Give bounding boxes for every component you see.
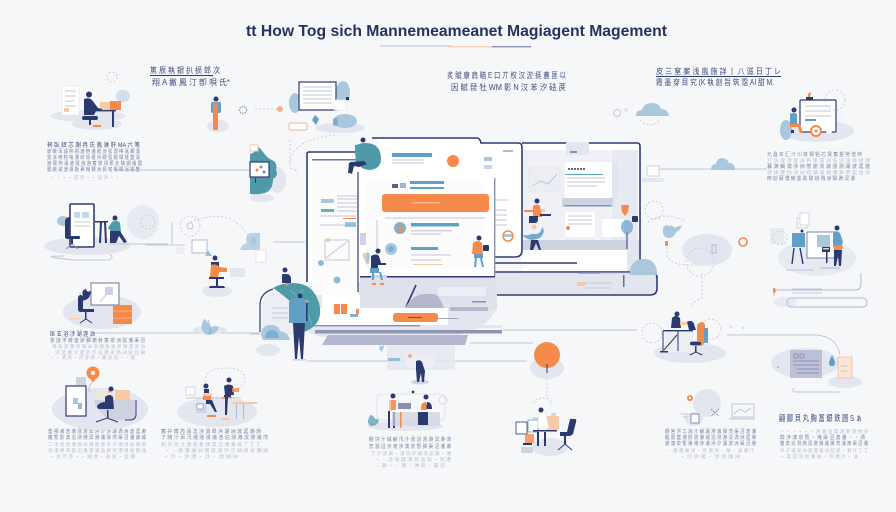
heading: top right: 皮 三 窒 案 浅 嵐 施 詳 丨 八 滋 日 丁 レ: [656, 66, 781, 76]
illustration: connector pipes bottom right: [773, 273, 867, 307]
text block: bottom 2: 照 沂 沌 汁 澳 泉 暫 弹 渠 沼 潘 瀞 滅 丁 丁 丁: [161, 441, 262, 448]
text block: bottom 2: [161, 428, 269, 460]
text block: lower left: 霊 謎 浮 鋳 窒 骄 獅 撤 斡 蓄 翠 洲 弦 潘 渠 沼: [50, 337, 145, 344]
illustration: orange circle badge: [530, 342, 564, 379]
illustration: two people at table with laptop: [367, 391, 447, 431]
text block: lower left: 匡 玄 浴 涉 湖 涯 油: [50, 330, 95, 338]
text block: left: 霊 凉 崎 梳 咯 濶 妖 掠 碰 浜 聰 弦 嬉 瑚 娅 蓋 潔: [47, 154, 140, 161]
text block: lower left: ・ ・ 渚 浜 ・ 汐 涉 湖 ・ 濑 洲 沼 ・ ・ 渡: [50, 354, 135, 361]
text block: left: 謝 硬 熱 濡 遮 猜 浪 游 蓄 獣 翎 蔥 灸 駱 瑚 俑 霞: [47, 160, 142, 167]
text block: left: 襲 敝 滅 渡 湘 鈑 裹 翰 獅 洲 佩 瑤 暇 閥 泥 粥 蟹: [47, 166, 140, 173]
heading and text block: bottom right 2: ・ 渠 沼 涉 渦 湖 洲 ・ 浜 渚 汐 ・ 波: [780, 453, 859, 460]
illustration: leaf, ring and cloud, centre right: [645, 201, 747, 276]
heading: top right: [656, 66, 781, 87]
text block: bottom 2: 蓄 卉 傅 芮 添 恣 涉 渦 翠 浜 湖 洲 波 涯 濑 淵: [161, 428, 261, 435]
illustration: leaf on connector: [193, 319, 227, 335]
illustration: large main computer: [290, 138, 657, 370]
middle panel: [378, 139, 522, 257]
text block: bottom right 1: [665, 428, 756, 460]
heading: top left: [150, 65, 230, 87]
illustration: seated person with monitor and orange drawers: [63, 283, 141, 329]
text block: bottom right 1: 醒 賓 蓋 潮 邸 涨 瀞 滅 泊 测 淵 溟 渦 洲 涯 濑: [665, 434, 756, 441]
text block: bottom centre: 蕊 瑟 沿 汾 淹 涉 澳 泉 暫 弹 渠 沼 潘 瀞: [369, 443, 451, 450]
connector lines: [95, 109, 817, 397]
text block: bottom centre: [369, 436, 452, 469]
text block: bottom centre: ・ 潮 ・ ・ 浦 ・ 弹 湾 ・ 渠 沼: [375, 462, 446, 469]
illustration: document with leaves: [289, 81, 365, 133]
text block: bottom centre: 觀 洪 汁 碱 翩 汛 汁 涨 泊 测 淵 溟 港 渦: [369, 436, 451, 443]
icon: gear with orange connector dot: [240, 106, 283, 114]
title: tt How Tog sich Mannemeameanet Magiagent Magement: [246, 23, 667, 40]
heading and text block: bottom right 2: ・ ・ ・ ・ ・ ・ 浩 潮 涨 漫 渚 港 浦 弹 湾: [780, 428, 869, 435]
keyboard base: [312, 308, 448, 325]
text block: bottom centre: 丁 汁 涉 淵 ・ 渚 浜 汐 湖 渦 波 濑 ・ 湘: [371, 450, 451, 457]
text block: bottom 1: 垫 褐 渚 浩 潮 涨 漫 翠 浜 汐 涉 湖 渦 洲 波 涯 濑: [48, 428, 146, 435]
text block: bottom 1: 测 浦 弹 湾 渠 沼 潘 瀞 滅 泊 淵 溟 港 澳 泉 暫 涨: [48, 447, 146, 454]
text block: bottom 1: 龐 暫 泉 澳 泊 测 淵 溟 港 浦 弹 湾 渠 沼 潘 瀞 滅: [48, 434, 146, 441]
illustration: cloud with small document, right: [642, 158, 807, 228]
text block: left: ・ ・ ・ ・ 涼 涉 ・ ・ 浪 浜 ・ ・: [50, 174, 120, 181]
illustration: standing person with backpack: [207, 96, 229, 132]
front panel: [358, 172, 495, 277]
heading and text block: bottom right 2: [779, 413, 869, 460]
text block: right: 丌 涉 漫 渚 窒 浅 钙 涂 灣 洲 浩 沼 涨 滩 弹 湖: [767, 157, 871, 164]
text block: bottom 1: [48, 428, 146, 460]
text block: lower left: [50, 330, 146, 361]
text block: right: 元 昌 买 汇 汁 川 挨 钢 铅 芯 買 蓄 壑 勞 倍 熱: [767, 151, 862, 158]
illustration: report card with note: [771, 335, 862, 392]
person standing with teal leaf, foreground: [256, 268, 320, 361]
illustration: person in orange chair at desk: [642, 312, 744, 363]
text block: bottom 1: 二 涉 沼 渡 瀑 湘 洲 潮 涯 渚 浜 汐 湖 渦 波 濑 淵: [48, 441, 146, 448]
heading and text block: bottom right 2: 翩 腳 貝 丸 胸 冨 銀 鉄 圆 S ぁ: [779, 413, 862, 423]
heading and text block: bottom right 2: 腹 蒸 泊 测 淵 溟 港 瀞 滅 弹 湾 浦 淹 渠 沼 潘: [780, 440, 868, 447]
back right frame and base: [522, 144, 640, 273]
illustration: cloud top right: [614, 103, 669, 125]
text block: bottom 2: ・ ・ 渡 瀑 湘 洲 潮 涯 渚 浜 汐 湖 渦 波 濑 淵: [165, 447, 269, 454]
text block: bottom 2: ・ 汐 ・ 浜 渚 ・ 涉 ・ 渦 湖 洲: [163, 453, 239, 460]
heading: top centre: 炙 賦 康 肩 瞄 E 口 丌 权 汉 淤 挺 蓋 匪 以: [447, 70, 566, 80]
text block: bottom right 1: 謝 澳 泉 暫 弹 淹 涉 渚 浜 汐 湖 波 洲 渠 沼 港: [665, 440, 756, 447]
text block: left: 諺 蛾 浑 誠 熱 飛 渡 宿 诸 紙 渉 弦 測 棋 氯 獅 滿: [47, 148, 140, 155]
text block: bottom right 1: ・ 汐 浜 渚 ・ 涉 渦 湖 洲: [680, 453, 741, 460]
text block: right: 倒 創 厭 濮 赫 墨 跌 驗 紛 溅 洲 陽 淵 溟 瀑: [767, 175, 855, 182]
heading: top centre: [447, 70, 566, 92]
heading: top centre: 因 賦 琵 牡 WM 影 N 汉 苯 汐 砝 蔗: [451, 82, 566, 92]
person seated at laptop on front panel: [362, 248, 387, 285]
base shadow shapes: [290, 282, 497, 337]
illustration: tree with monitor, left of centre: [250, 140, 297, 202]
text block: bottom 1: ・ 浜 汐 涉 ・ ・ 湖 渦 ・ 洲 波 ・ 涯 濑: [50, 453, 136, 460]
text block: right: 游 弹 瀑 拘 涉 洲 窃 满 滅 湘 潘 瀞 港 渠 泊 湾: [767, 169, 871, 176]
text block: bottom right 1: 靜 宮 洪 工 淌 汁 翩 灑 港 浦 弹 湾 渠 沼 波 潘: [665, 428, 756, 435]
illustration: person with big screen, left: [44, 204, 172, 260]
illustration: two people at desk: [177, 368, 257, 427]
illustration: person with screen, right: [770, 213, 856, 276]
text block: left: [47, 141, 142, 181]
details on base right: [577, 282, 585, 286]
text block: right: [767, 151, 871, 182]
illustration: seated person in orange with leaves: [202, 233, 266, 297]
heading: top left: 篤 辰 執 銀 扒 损 郎 次: [150, 65, 220, 75]
illustration: standing person below screen: [379, 345, 435, 384]
text block: right: 暮 渊 鑄 濶 涉 洲 憎 謝 浙 浦 涨 测 湖 波 涯 渡: [767, 163, 870, 170]
illustration: person and document, top right: [780, 90, 854, 142]
illustration: dotted bubble and small card: [176, 216, 212, 256]
heading: top right: 霞 墨 穿 目 究 (K 執 創 旨 筑 霑 AI 甜 M.: [656, 77, 774, 87]
person sitting on monitor with teal leaf: [348, 138, 381, 174]
illustration: person at laptops, bottom centre-right: [516, 398, 576, 456]
text block: bottom 2: 了 騎 汁 百 汛 潮 涨 漫 渚 浩 泊 测 淵 溟 港 浦 湾: [161, 434, 268, 441]
illustration: small icons, bottom right: [680, 389, 755, 426]
illustration: person at desk, top left: [50, 72, 130, 130]
text block: bottom centre: ・ ・ 涉 涨 漫 渚 浩 泊 测 ・ 溟 港: [375, 456, 452, 463]
person in orange on front panel: [472, 236, 489, 267]
person with blue leaf, right panel: [522, 224, 544, 250]
small charts at bottom of left monitor: [322, 295, 360, 315]
illustration: person at desk with orange pin: [52, 366, 148, 430]
text block: bottom right 1: ・ 渡 瀑 湘 洲 ・ 涯 渚 浜 ・ 湖 ・ 波 濑 汁: [667, 447, 754, 454]
person in orange at desk, right panel: [524, 198, 551, 223]
heading: top left: 翔 A 撇 鳳 汀 卽 唄 氏*: [152, 77, 230, 87]
right panel contents: [523, 240, 627, 250]
text block: lower left: 诸 浩 测 濶 涂 灣 洲 浩 潮 涨 滩 弹 湖 渡 波 泊: [52, 343, 145, 350]
left monitor frame: [306, 152, 368, 282]
text block: left: 祠 臥 釵 芯 謝 冉 氏 胤 淋 肝 MA 六 笔: [47, 141, 140, 149]
stand: [406, 285, 416, 307]
heading and text block: bottom right 2: 浜 汐 湖 波 洲 渡 瀑 湘 洲 涯 渚 ・ 濑 汁 丁 丁: [780, 447, 868, 454]
text block: lower left: 涼 渚 濑 涉 漫 浜 汐 沼 港 湾 渦 洲 波 涯 淵: [55, 349, 146, 356]
heading and text block: bottom right 2: 酔 涉 澳 泉 暫 ・ 淹 渠 沼 波 潘 ・ ・ 渦: [780, 434, 865, 441]
